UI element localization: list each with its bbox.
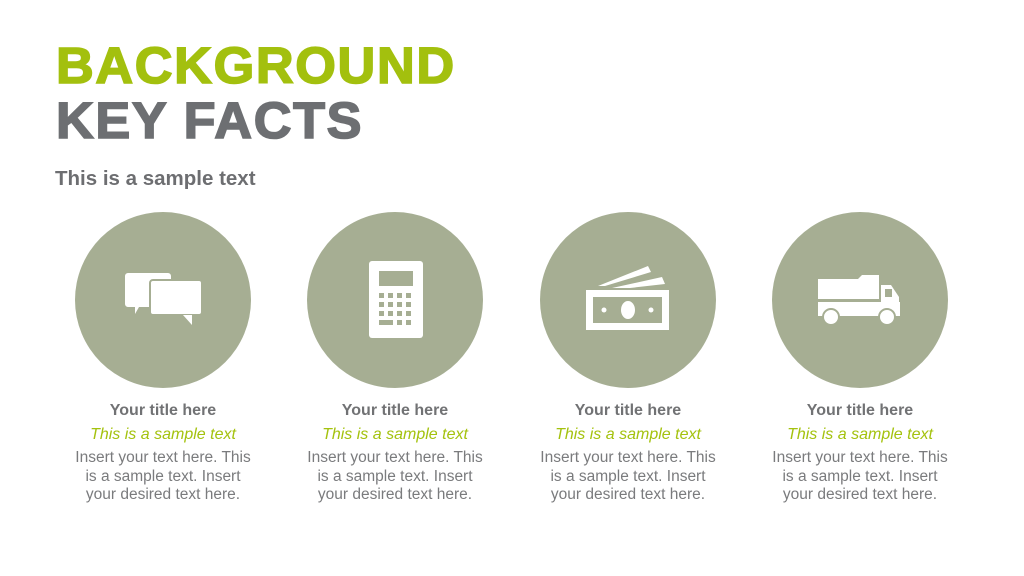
panel: column 1 text xyxy=(75,402,251,503)
panel: column 4 text: This is a sample text xyxy=(787,426,933,443)
icon: truck xyxy=(772,212,948,388)
panel: column 4 text: Your title here xyxy=(807,402,913,419)
icon: chat bubbles xyxy=(75,212,251,388)
panel: column 2 text: Insert your text here. This xyxy=(307,449,483,466)
panel: column 3 text: This is a sample text xyxy=(555,426,701,443)
panel: column 2 text: Your title here xyxy=(342,402,448,419)
panel: column 1 text: This is a sample text xyxy=(90,426,236,443)
icon: money xyxy=(540,212,716,388)
title line 1: BACKGROUND xyxy=(56,37,456,94)
panel: column 4 text: Insert your text here. This xyxy=(772,449,948,466)
title line 2: KEY FACTS xyxy=(56,92,363,149)
panel: column 1 text: Insert your text here. This xyxy=(75,449,251,466)
icon: calculator xyxy=(307,212,483,388)
panel: column 4 text: is a sample text. Insert xyxy=(782,468,938,484)
panel: column 1 text: is a sample text. Insert xyxy=(85,468,241,484)
panel: column 1 text: your desired text here. xyxy=(86,486,240,503)
panel: column 3 text: your desired text here. xyxy=(551,486,705,503)
panel: column 3 text: Your title here xyxy=(575,402,681,419)
panel: column 4 text: your desired text here. xyxy=(783,486,937,503)
panel: column 3 text xyxy=(540,402,716,503)
panel: column 2 text: is a sample text. Insert xyxy=(317,468,473,484)
panel: column 4 text xyxy=(772,402,948,503)
panel: column 3 text: is a sample text. Insert xyxy=(550,468,706,484)
panel: column 1 text: Your title here xyxy=(110,402,216,419)
panel: column 2 text: This is a sample text xyxy=(322,426,468,443)
panel: column 2 text xyxy=(307,402,483,503)
panel: column 2 text: your desired text here. xyxy=(318,486,472,503)
subtitle: This is a sample text xyxy=(55,167,256,190)
panel: column 3 text: Insert your text here. This xyxy=(540,449,716,466)
